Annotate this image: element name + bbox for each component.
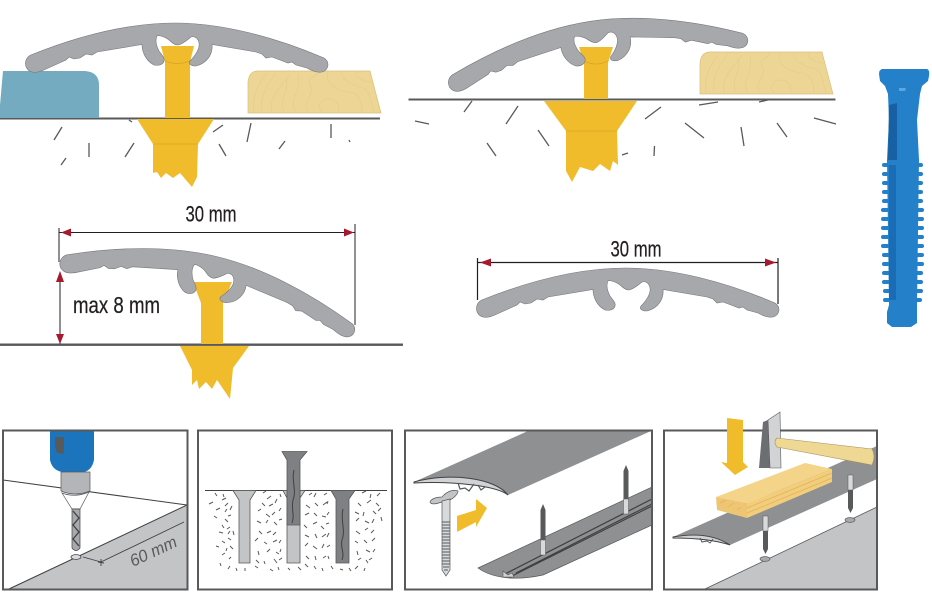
screw left xyxy=(430,490,458,576)
panel 4: hammering profile into place xyxy=(664,412,877,590)
cover strip xyxy=(414,431,651,495)
profile strip xyxy=(673,446,877,545)
dimension: 30 mm: 30 mm xyxy=(186,202,236,226)
dimension: 30 mm xyxy=(59,202,355,325)
screw and dowel xyxy=(137,46,214,187)
blue wall plug xyxy=(879,69,929,327)
base strip xyxy=(478,487,652,578)
dowel being inserted xyxy=(282,452,307,563)
panel 3: clip profile onto screws xyxy=(405,430,652,590)
concrete marks xyxy=(54,120,350,165)
plug shading xyxy=(888,103,897,160)
hammer xyxy=(759,412,874,468)
profile xyxy=(442,0,749,93)
seated dowel xyxy=(331,490,355,563)
floor line xyxy=(0,118,380,120)
floor surface xyxy=(9,505,187,589)
surface line xyxy=(205,490,387,492)
floor surface xyxy=(705,507,877,589)
empty hole xyxy=(233,490,256,563)
diagram: profile between tile and wood xyxy=(0,23,381,187)
screw right xyxy=(624,465,628,514)
panel 2: dowel insertion xyxy=(198,430,392,590)
profile xyxy=(476,268,779,317)
wood block xyxy=(248,71,381,113)
profile xyxy=(25,23,328,72)
dimension: 30 mm xyxy=(478,236,778,304)
dimension lines xyxy=(83,522,184,566)
yellow arrow down xyxy=(721,418,748,475)
drill xyxy=(50,431,94,550)
wood block xyxy=(700,52,833,94)
floor line xyxy=(408,98,836,100)
tile block xyxy=(0,71,99,118)
panel 1: drilling xyxy=(3,430,188,590)
diagram: profile with dimensions, 30 mm and max 8 mm xyxy=(0,202,403,399)
screw middle xyxy=(540,504,546,555)
yellow arrow xyxy=(457,499,487,532)
screw and dowel xyxy=(180,282,249,399)
label: 60 mm: 60 mm xyxy=(127,532,180,571)
dimension: 30 mm: 30 mm xyxy=(610,236,662,262)
profile xyxy=(58,222,364,339)
hole xyxy=(71,555,81,559)
diagram: profile with height difference to wood xyxy=(408,0,836,182)
ribs xyxy=(883,165,922,300)
dimension: max 8 mm: max 8 mm xyxy=(73,292,160,318)
concrete speckle xyxy=(209,491,382,571)
diagram: profile with 30 mm width xyxy=(476,236,779,317)
screw and dowel xyxy=(544,47,637,182)
wall line xyxy=(3,480,187,505)
floor line xyxy=(0,344,403,346)
plug body xyxy=(879,69,929,327)
concrete marks xyxy=(415,99,836,156)
dimension: max 8 mm xyxy=(56,271,160,344)
screws xyxy=(760,475,855,561)
wooden block xyxy=(716,463,832,518)
